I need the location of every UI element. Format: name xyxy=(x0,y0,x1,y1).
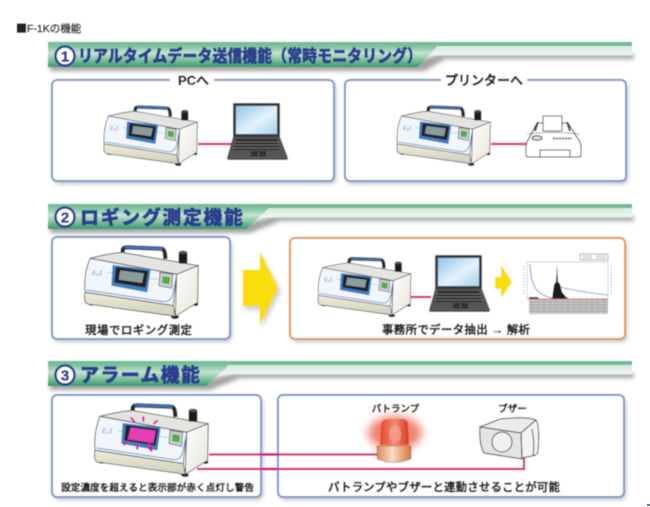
panel: プリンターへ xyxy=(345,73,628,184)
label: patrol lamp: パトランプ xyxy=(372,404,420,415)
device xyxy=(397,107,490,166)
panel: alarm display xyxy=(52,395,263,500)
icon: printer xyxy=(526,116,581,157)
number 2 xyxy=(56,208,74,226)
connection line xyxy=(411,296,431,298)
device xyxy=(104,107,197,166)
banner shadow xyxy=(50,216,634,233)
caption: 現場でロギング測定 xyxy=(85,323,192,337)
arrow: yellow xyxy=(243,252,281,328)
device: E₂1 xyxy=(324,277,333,283)
caption: 事務所でデータ抽出 → 解析 xyxy=(382,322,530,336)
caption: 設定濃度を超えると表示部が赤く点灯し警告 xyxy=(61,481,254,494)
device xyxy=(85,247,198,319)
banner shadow xyxy=(50,54,634,71)
label: PC: PCへ xyxy=(178,73,209,88)
section 3 title: アラーム機能 xyxy=(80,364,200,386)
icon: laptop xyxy=(429,255,490,312)
connection line xyxy=(491,143,528,145)
number 3: 3 xyxy=(61,368,69,384)
banner light band xyxy=(220,361,632,374)
device: E₂1 xyxy=(110,126,119,132)
number 1: 1 xyxy=(61,48,69,66)
device: E₂1 xyxy=(92,270,103,277)
panel: 現場でロギング測定 xyxy=(52,237,232,342)
banner light band xyxy=(430,42,632,55)
number 2: 2 xyxy=(61,210,69,226)
number 3 xyxy=(56,366,74,384)
section 1 banner xyxy=(48,42,634,71)
label: buzzer: ブザー xyxy=(498,403,527,415)
banner dark tab xyxy=(48,42,440,67)
caption: パトランプやブザーと連動させることが可能 xyxy=(328,480,560,494)
panel: 事務所でデータ抽出 → 解析 xyxy=(290,238,627,342)
device xyxy=(318,258,411,317)
panel: PCへ xyxy=(52,73,336,184)
banner light band xyxy=(260,204,632,217)
section 2 title: ロギング測定機能 xyxy=(80,206,243,229)
number 1 xyxy=(56,46,74,66)
icon: patrol lamp xyxy=(368,416,422,462)
arrow: small yellow xyxy=(495,265,512,298)
connection line xyxy=(198,143,234,145)
banner dark tab xyxy=(48,361,232,386)
section 1 title: リアルタイムデータ送信機能（常時モニタリング） xyxy=(78,46,422,66)
section 2 banner xyxy=(48,204,634,233)
device with alert screen xyxy=(95,405,208,477)
section 3 banner xyxy=(48,361,634,390)
panel: linked devices xyxy=(197,395,626,500)
page heading: ■F-1Kの機能 xyxy=(16,20,82,36)
device with alert screen: E₂1 xyxy=(102,428,113,435)
icon: laptop xyxy=(227,103,288,160)
connection lines to lamp and buzzer xyxy=(197,454,524,469)
banner shadow xyxy=(50,373,634,390)
label: printer: プリンターへ xyxy=(445,73,523,88)
banner dark tab xyxy=(48,204,272,229)
corner mark xyxy=(647,504,650,506)
icon: buzzer xyxy=(480,418,539,459)
line chart xyxy=(524,254,611,314)
device: E₂1 xyxy=(403,126,412,132)
